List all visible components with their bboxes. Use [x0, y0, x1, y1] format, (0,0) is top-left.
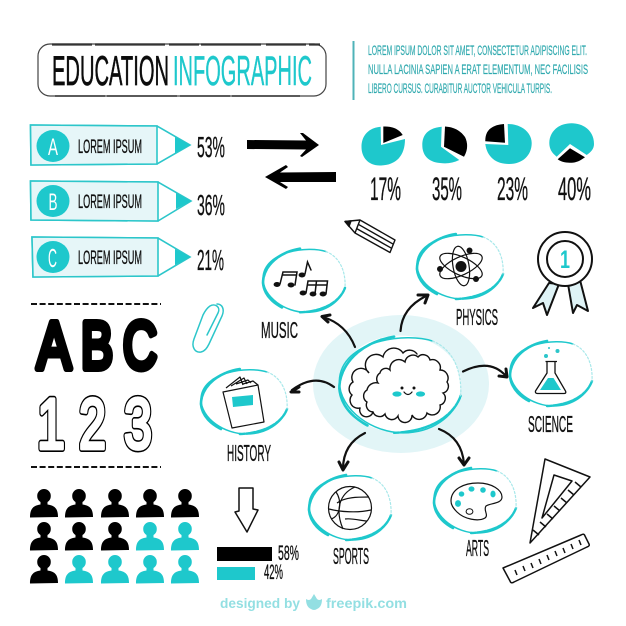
node: history: [201, 369, 287, 466]
pencil bar A: A: [48, 134, 58, 161]
node: music: MUSIC: [261, 317, 298, 343]
ABC lettering: C: [123, 308, 157, 384]
pie 23%: [485, 124, 532, 207]
123 outline numerals: 1: [37, 386, 65, 464]
123 outline numerals: [37, 386, 152, 464]
pencil bar B: [30, 181, 191, 221]
arrow left: [265, 165, 336, 189]
pie 40%: [549, 123, 594, 207]
node: science: [510, 341, 592, 437]
icon: basketball: [328, 486, 372, 530]
dashed divider top: [31, 303, 161, 305]
pie 17%: [362, 126, 405, 207]
pencil bar C: [32, 237, 190, 277]
pencil bar A: [30, 125, 190, 165]
text: 53%: [197, 132, 225, 164]
123 outline numerals: 3: [124, 386, 152, 464]
dashed divider bottom: [31, 466, 161, 468]
intro paragraph: [352, 41, 588, 100]
pencil bar B: LOREM IPSUM: [78, 192, 142, 213]
pencil bar A: LOREM IPSUM: [78, 137, 142, 158]
pie 17%: 17%: [370, 171, 401, 207]
node: sports: SPORTS: [333, 543, 369, 569]
pie 35%: [422, 126, 467, 207]
people pictogram: [30, 489, 199, 584]
icon: palette: [451, 483, 502, 520]
credit line: designed by: [220, 595, 300, 611]
arrow to sports: [339, 433, 365, 470]
centre ring with cloud: [339, 336, 461, 433]
ABC lettering: B: [81, 308, 113, 384]
pencil bar C: LOREM IPSUM: [78, 248, 142, 269]
123 outline numerals: 3: [124, 386, 152, 464]
123 outline numerals: 1: [37, 386, 65, 464]
comparison bars: 42%: [264, 561, 283, 584]
arrow to arts: [439, 429, 469, 465]
node: sports: [309, 475, 391, 569]
pie 23%: 23%: [497, 171, 528, 207]
123 outline numerals: 2: [79, 386, 106, 464]
comparison bars: [217, 542, 299, 584]
pencil bar B: B: [48, 189, 58, 216]
pencil bar C: C: [48, 243, 57, 273]
arrow to music: [322, 315, 355, 347]
pie 40%: 40%: [558, 171, 591, 207]
icon: medal: 1: [560, 246, 570, 274]
credit line: [220, 594, 407, 611]
node: arts: ARTS: [466, 535, 489, 561]
title banner: EDUCATION: [52, 47, 169, 94]
pale halo behind centre: [313, 315, 489, 453]
icon: smiling cloud: [349, 348, 448, 423]
arrow to science: [463, 366, 507, 377]
pie 35%: 35%: [432, 171, 462, 207]
icon: medal: [533, 232, 592, 315]
ABC lettering: [37, 308, 157, 384]
arrow to physics: [400, 295, 428, 331]
icon: set square: [530, 459, 590, 543]
text: 21%: [197, 245, 224, 277]
icon: book: [223, 377, 264, 428]
icon: flask: [535, 347, 566, 394]
icon: atom: [436, 245, 486, 287]
arrow to history: [291, 381, 334, 392]
credit line: freepik.com: [326, 595, 407, 611]
node: music: [261, 249, 345, 343]
node: physics: [417, 234, 503, 330]
text: 36%: [197, 190, 225, 222]
icon: ruler: [503, 534, 589, 583]
icon: paperclip: [193, 304, 223, 352]
123 outline numerals: 2: [79, 386, 106, 464]
icon: freepik mark: [306, 594, 322, 610]
text: 58%: [278, 542, 299, 565]
ABC lettering: A: [37, 308, 71, 384]
icon: down arrow: [235, 488, 258, 532]
node: history: HISTORY: [227, 440, 271, 466]
text: PHYSICS: [456, 304, 498, 330]
icon: music notes: [274, 262, 328, 296]
arrow right: [247, 133, 319, 157]
title banner: INFOGRAPHIC: [173, 47, 312, 94]
node: arts: [434, 468, 516, 561]
icon: pencil: [345, 220, 395, 252]
